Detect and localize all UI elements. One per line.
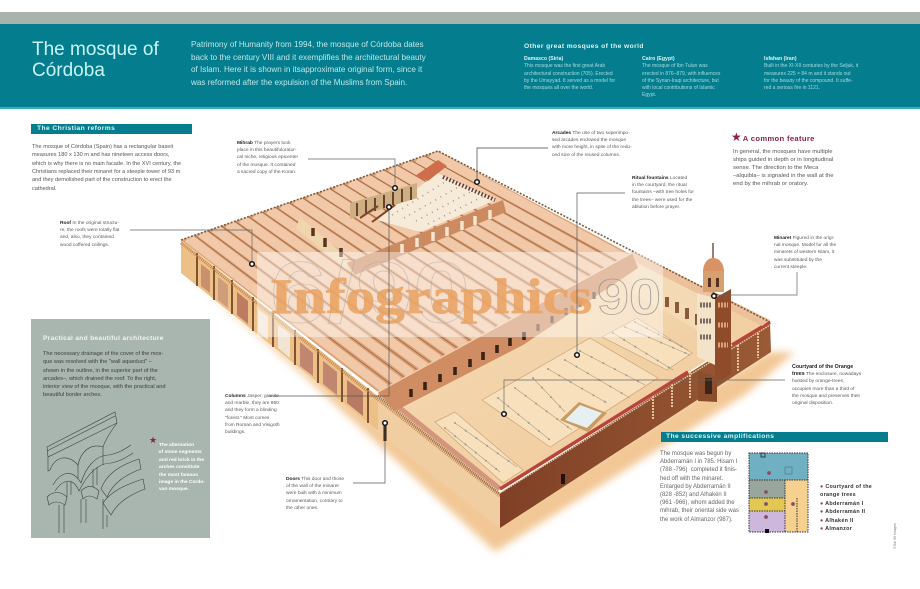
leader: mihrab xyxy=(308,159,395,188)
text: amplifications: The mosque was begun by xyxy=(660,451,731,457)
label: Minaret: was substituted by the xyxy=(774,258,822,263)
text: amplifications xyxy=(660,450,739,523)
leader: courtyard xyxy=(504,380,785,414)
text: Christian reforms: The mosque of Córdoba (Spain) has a rectangular baseit xyxy=(32,144,173,150)
mosque: Isfahan: Built in the XI-XII centuries by the Seljuk, it xyxy=(764,63,858,69)
label: Mihrab: Mihrab The prayers took xyxy=(237,141,290,146)
panel text: beautiful border arches. xyxy=(43,392,102,398)
orange tree planters xyxy=(435,318,692,483)
intro text xyxy=(191,40,426,86)
label: Ritual fountains: in the courtyard, the ritual xyxy=(632,183,687,188)
label: Ritual fountains: fountains –with tree holes for xyxy=(632,190,694,195)
star note: van mosque. xyxy=(159,487,189,492)
label: Arcades: sed arcades endowed the mosque xyxy=(552,138,626,143)
watermark: 90 xyxy=(597,269,661,325)
left outer wall xyxy=(181,240,500,528)
text: Christian reforms: and they demolished part of the construction to erect the xyxy=(32,177,172,183)
section bar: successive amplifications xyxy=(661,432,888,442)
mosque: Isfahan: Isfahan (Iran) xyxy=(764,56,797,62)
mosque: Cairo: Cairo (Egypt) xyxy=(642,56,675,62)
mosque: Damasco: This mosque was the first great Arab xyxy=(524,63,605,69)
text: Christian reforms: cathedral. xyxy=(32,186,57,192)
leader: doors xyxy=(353,423,385,483)
mosque: Cairo: erected in 876–879, with influences xyxy=(642,71,720,77)
section bar: Christian reforms: The Christian reforms xyxy=(37,125,115,132)
right outer wall xyxy=(500,322,771,528)
plan legend xyxy=(820,484,872,532)
label: Mihrab xyxy=(237,140,298,175)
illustration: mosque cutaway xyxy=(130,148,798,556)
leader: columns xyxy=(268,207,389,396)
plan legend: orange trees xyxy=(820,492,856,498)
mosque: Cairo: with local contributions of Islamic xyxy=(642,85,715,91)
plan legend: ● Abderramán II xyxy=(820,509,865,515)
mosque: Cairo: of the Syrian-Iraqi architecture, but xyxy=(642,78,719,84)
callout markers xyxy=(250,180,716,425)
star note: image in the Cordo- xyxy=(159,480,205,485)
label: Doors: of the wall of the minaret xyxy=(286,484,339,489)
leader: arcades xyxy=(477,148,548,182)
label: Doors xyxy=(286,476,344,511)
other mosques heading: Other great mosques of the world xyxy=(524,43,644,50)
label: Roof: wood coffered ceilings. xyxy=(60,243,109,248)
ground shadow xyxy=(186,274,795,552)
panel text: shown in the outline, in the superior part of the xyxy=(43,368,158,374)
top grey strip xyxy=(0,12,920,24)
label: Minaret: minarets of western Islam, it xyxy=(774,250,834,255)
leader: roof xyxy=(130,230,252,264)
star note: The alternation xyxy=(159,443,194,448)
intro text: was reformed after the expulsion of the Muslims from Spain. xyxy=(191,78,407,86)
star note: of stone segments xyxy=(158,450,202,455)
header underline xyxy=(0,107,920,108)
section bar: Christian reforms xyxy=(31,124,192,134)
label: Arcades: Arcades The use of two superimpo- xyxy=(552,131,630,136)
label: Ritual fountains: ablution before prayer. xyxy=(632,205,680,210)
mosque building xyxy=(181,151,795,552)
credit: ©Sol 90 Images xyxy=(893,523,897,549)
mosque: Cairo: The mosque of Ibn Tulun was xyxy=(642,63,708,69)
label: Columns xyxy=(225,394,280,435)
label: Columns: "forest." Most comes xyxy=(225,416,269,421)
leader: ritual fountains xyxy=(577,193,625,355)
plan legend: ● Courtyard of the xyxy=(820,484,872,490)
label: Courtyard of the Orange trees: the mosque and preserves their xyxy=(792,394,860,399)
label: Arcades: ced size of the reused columns. xyxy=(552,153,620,158)
mosque: Damasco: by the Umayyad. It served as a model for xyxy=(524,78,615,84)
label: Mihrab: place in this beautifulorator- xyxy=(237,148,297,153)
text: A common feature: ships guided in depth or in longitudinal xyxy=(733,157,833,163)
star note: arches constitute xyxy=(159,465,200,470)
mosque: Damasco: the mosques all over the world. xyxy=(524,85,593,91)
text: Christian reforms xyxy=(32,144,181,192)
mosque: Isfahan: for the beauty of the compound. It suffe- xyxy=(764,78,853,84)
label: Columns: buildings. xyxy=(225,430,245,435)
text: A common feature xyxy=(733,149,834,187)
text: amplifications: hed off with the minaret. xyxy=(660,476,723,482)
panel text: que was resolved with the "wall aqueduct" – xyxy=(43,359,152,365)
label: Courtyard of the Orange trees: trees The enclosure, nowadays xyxy=(792,371,861,377)
arch line drawing xyxy=(46,412,146,533)
court frieze walls xyxy=(378,322,770,494)
label: Columns: and marble, they are 850 xyxy=(225,401,279,406)
heading: A common feature: ★A common feature xyxy=(731,130,815,144)
text: amplifications: mihrab, their oriental side was xyxy=(660,508,739,514)
text: amplifications: (961 -966), whom added the xyxy=(660,500,735,506)
watermark: Infographics xyxy=(270,268,592,324)
label: Roof: and, also, they contained xyxy=(60,235,114,240)
label: Mihrab: a sacred copy of the Koran. xyxy=(237,170,296,175)
title: Córdoba xyxy=(32,60,105,81)
label: Arcades xyxy=(552,130,632,158)
title: The mosque of xyxy=(32,39,159,60)
mosque: Damasco: architectural construction (705). Erected xyxy=(524,71,613,77)
star note xyxy=(158,442,205,492)
label: Minaret: nal mosque. Model for all the xyxy=(774,243,836,248)
text: Christian reforms: which is why there is no main facade. In the XVI century, the xyxy=(32,161,181,167)
north-east gallery wall xyxy=(627,251,770,332)
intro text: of Islam. Here it is shown in itsapproximate original form, since it xyxy=(191,65,422,74)
section bar: successive amplifications: The successive amplifications xyxy=(666,433,774,440)
label: Arcades: with more height, in spite of the redu- xyxy=(552,145,632,150)
fountain xyxy=(560,402,607,432)
label: Courtyard of the Orange trees: Courtyard of the Orange xyxy=(792,364,853,370)
label: Minaret: current steeple. xyxy=(774,265,807,270)
watermark: 6/90 xyxy=(270,245,470,341)
label: Mihrab: cal niche, religious epicenter xyxy=(237,155,298,160)
label: Roof xyxy=(60,220,120,248)
text: Christian reforms: measures 180 x 130 m and has nineteen access doors, xyxy=(32,152,169,158)
panel text: arcades–, which drained the roof. To the right, xyxy=(43,376,156,382)
leader: minaret xyxy=(714,272,797,295)
label: Ritual fountains xyxy=(632,176,694,210)
label: Minaret xyxy=(774,236,836,270)
text: amplifications: Enlarged by Abderramán II xyxy=(660,484,731,490)
label: Minaret: Minaret Figured in the origi- xyxy=(774,236,834,241)
panel heading: Practical and beautiful architecture xyxy=(43,335,164,342)
watermark xyxy=(257,245,663,341)
label: Roof: Roof In the original structu- xyxy=(60,221,119,226)
text: A common feature: –alquibla– is signaled in the wall at the xyxy=(733,173,834,179)
mosque: Damasco xyxy=(524,56,616,91)
label: Columns: Columns Jasper, granite xyxy=(225,394,279,399)
text: amplifications: Abderramán I in 785. Hisam I xyxy=(660,459,737,465)
label: Roof: re, the roofs were totally flat xyxy=(60,228,120,233)
text: Christian reforms: Christians replaced their minaret for a steeple tower of 93 m xyxy=(32,169,180,175)
mosque: Damasco: Damasco (Siria) xyxy=(524,56,563,62)
panel: practical architecture xyxy=(31,319,210,538)
main arcade facing the court xyxy=(378,253,638,411)
plan legend: ● Abderramán I xyxy=(820,501,864,507)
star note: the most famous xyxy=(159,473,198,478)
text: A common feature: sense. The direction to the Meca xyxy=(733,165,818,171)
plan legend: ● Alhakén II xyxy=(820,518,854,524)
plan diagram xyxy=(748,452,808,533)
label: Mihrab: of the mosque. It contained xyxy=(237,163,295,168)
text: amplifications: (788 -796) completed it finis- xyxy=(660,467,737,473)
panel text xyxy=(43,351,166,398)
label: Columns: and they form a blinding xyxy=(225,408,277,413)
label: Columns: from Roman and Visigoth xyxy=(225,423,280,428)
text: A common feature: end by the mihrab or oratory. xyxy=(733,181,808,187)
label: Courtyard of the Orange trees xyxy=(792,364,861,406)
label: Courtyard of the Orange trees: original disposition. xyxy=(792,401,833,406)
label: Doors: the other ones. xyxy=(286,506,318,511)
label: Doors: were built with a minimum xyxy=(286,491,342,496)
label: Doors: Doors This door and those xyxy=(286,477,344,482)
label: Courtyard of the Orange trees: occupies more than a third of xyxy=(792,387,854,392)
icon: star: ★ xyxy=(149,435,157,445)
cutaway interior xyxy=(296,160,506,275)
header band xyxy=(0,24,920,109)
mosque: Cairo: Egypt. xyxy=(642,92,656,98)
text: amplifications: (828 -852) and Alhakén II xyxy=(660,492,727,498)
label: Doors: ornamentation, contrary to xyxy=(286,499,343,504)
courtyard floor xyxy=(378,255,770,487)
title xyxy=(32,39,159,81)
label: Ritual fountains: Ritual fountains Located xyxy=(632,176,687,181)
mosque: Cairo xyxy=(642,56,720,98)
panel text: interior view of the mosque, with the practical and xyxy=(43,384,166,390)
text: A common feature: In general, the mosques have multiple xyxy=(733,149,833,155)
prayer hall roof xyxy=(181,151,770,392)
mosque: Isfahan: measures 225 × 84 m and it stands out xyxy=(764,71,851,77)
minaret xyxy=(697,243,731,402)
star note: and red brick in the xyxy=(159,458,204,463)
mosque: Isfahan: red a serious fire in 1121. xyxy=(764,85,820,91)
panel text: The necessary drainage of the cover of the mos- xyxy=(43,351,163,357)
label: Courtyard of the Orange trees: hoisted by orange-trees, xyxy=(792,379,844,384)
plan legend: ● Almanzor xyxy=(820,526,852,532)
text: amplifications: the work of Almanzor (987). xyxy=(660,517,733,523)
mosque: Isfahan xyxy=(764,56,858,91)
intro text: Patrimony of Humanity from 1994, the mosque of Córdoba dates xyxy=(191,40,424,49)
intro text: back to the century VIII and it exemplifies the architectural beauty xyxy=(191,52,426,62)
label: Ritual fountains: the trees– were used for the xyxy=(632,198,692,203)
